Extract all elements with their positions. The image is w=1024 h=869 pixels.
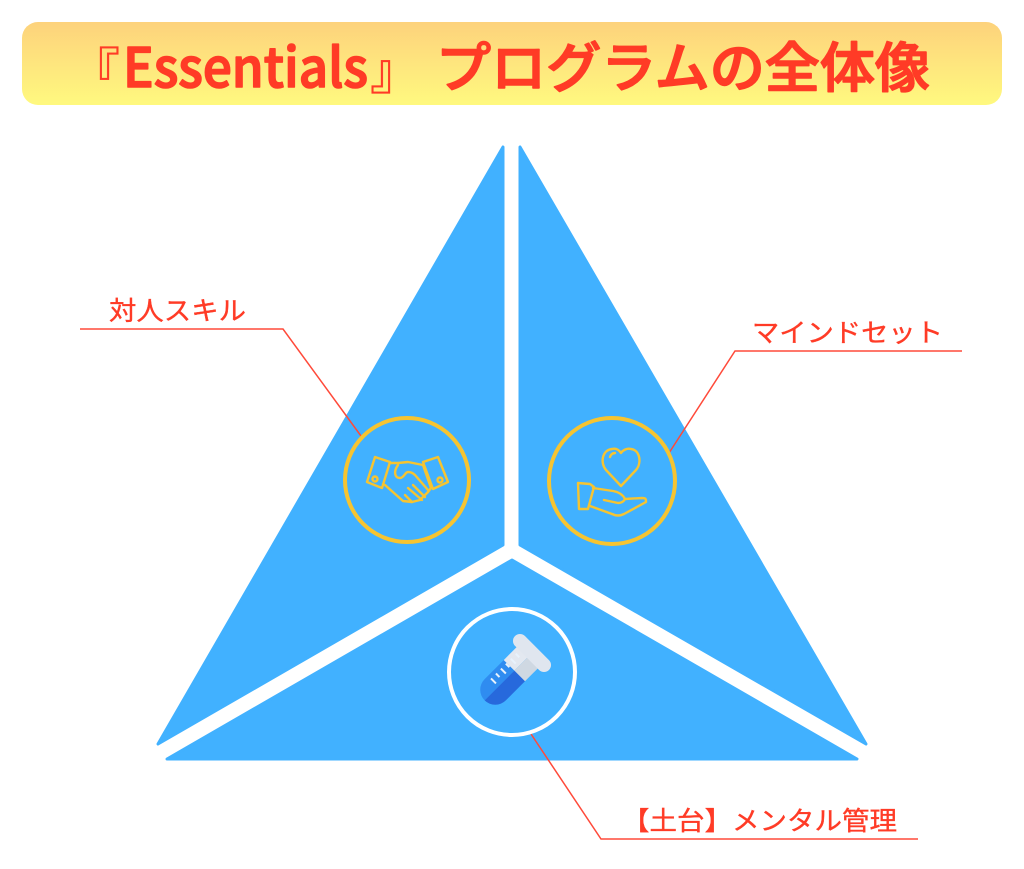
title: 『 <box>70 32 120 104</box>
label: mindset: マインドセット <box>752 318 943 348</box>
title: 』 <box>370 32 420 104</box>
title <box>70 24 930 104</box>
pyramid diagram <box>158 147 866 759</box>
leader line: mental management <box>531 734 918 839</box>
segment: right triangle <box>520 147 866 744</box>
title: Essentials <box>123 24 368 103</box>
label: interpersonal skills: 対人スキル <box>109 296 246 326</box>
title: プログラムの全体像 <box>436 24 930 103</box>
icon: heart in hand in circle <box>549 418 675 544</box>
leader line: mindset <box>669 351 962 453</box>
test tube <box>468 631 554 717</box>
icon: test tube in circle <box>449 609 575 735</box>
icon: handshake in circle <box>345 418 469 542</box>
label: mental management: 【土台】メンタル管理 <box>622 806 897 836</box>
title banner <box>22 22 1002 105</box>
leader line: interpersonal skills <box>80 329 361 436</box>
segment: bottom triangle <box>167 560 857 759</box>
segment: left triangle <box>158 147 503 744</box>
